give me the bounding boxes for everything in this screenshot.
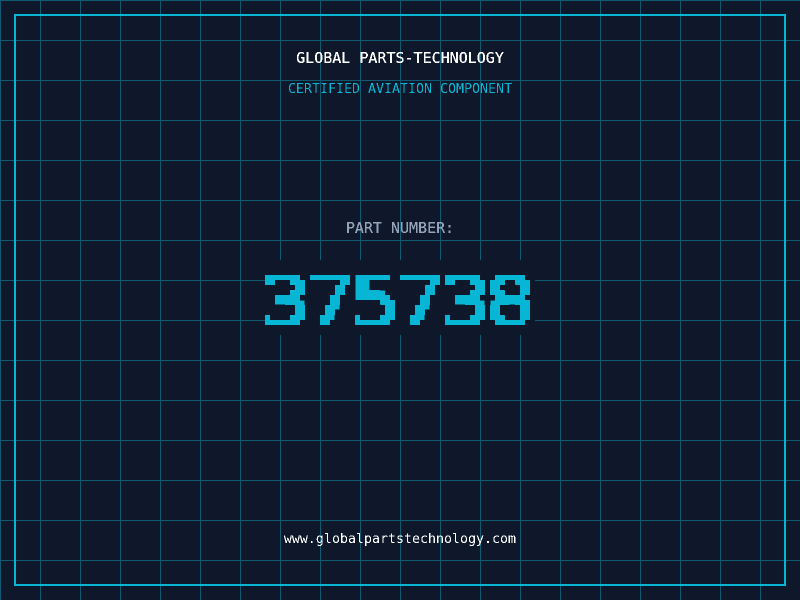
part number backing [265, 260, 535, 335]
subtitle: CERTIFIED AVIATION COMPONENT [288, 82, 512, 97]
title: GLOBAL PARTS-TECHNOLOGY [296, 49, 504, 67]
part number value: 375738 [260, 263, 536, 342]
part number panel [260, 260, 536, 342]
website url: www.globalpartstechnology.com [284, 532, 516, 547]
part number label: PART NUMBER: [346, 219, 454, 237]
